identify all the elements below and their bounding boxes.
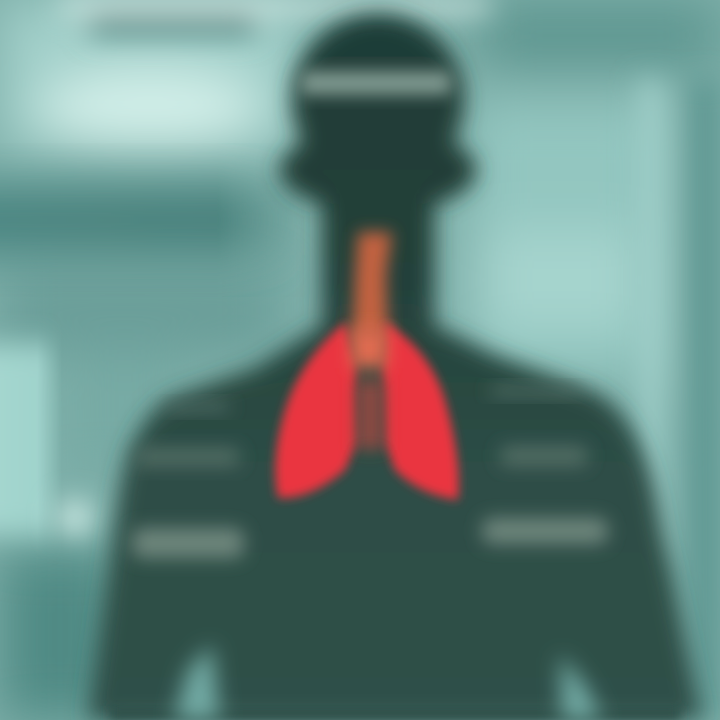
left side text lines bbox=[132, 402, 244, 558]
solid strip so the torso reaches the bottom edge bbox=[110, 706, 680, 720]
gaps between arms and torso bbox=[174, 645, 602, 720]
icon: lungs bbox=[275, 232, 459, 500]
right side text lines bbox=[482, 386, 608, 544]
lung lobes bbox=[275, 322, 459, 500]
trachea bbox=[352, 232, 392, 340]
headline bar on forehead bbox=[300, 71, 452, 95]
bronchi and centre bbox=[350, 328, 388, 450]
